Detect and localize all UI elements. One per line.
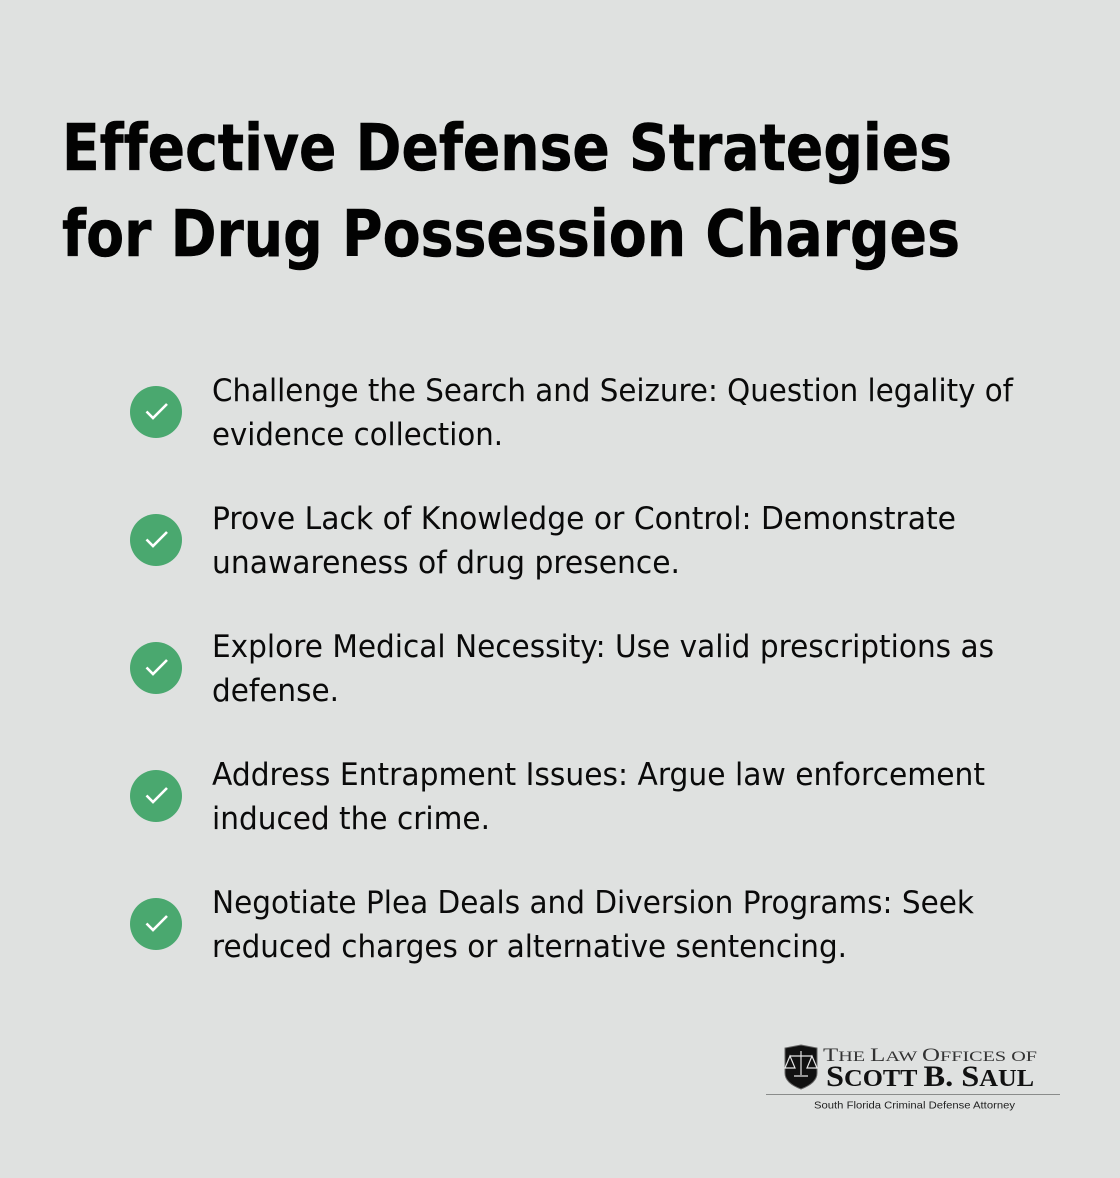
title: Effective Defense Strategies: [62, 112, 952, 186]
text: challenge the search: [212, 373, 1014, 453]
item 4: [130, 757, 985, 837]
icon: check 3: [130, 642, 182, 694]
icon: shield with scales: [785, 1045, 817, 1089]
text: medical necessity: defense.: [212, 673, 339, 709]
text: challenge the search: Challenge the Search and Seizure: Question legality of: [212, 373, 1014, 409]
icon: check 4: [130, 770, 182, 822]
icon: check 2: [130, 514, 182, 566]
logo text: SCOTT B. SAUL: [826, 1060, 1034, 1093]
text: plea deals: Negotiate Plea Deals and Diversion Programs: Seek: [212, 885, 975, 921]
logo: law offices: [766, 1045, 1060, 1112]
item 3: [130, 629, 994, 709]
text: entrapment: Address Entrapment Issues: Argue law enforcement: [212, 757, 985, 793]
text: plea deals: [212, 885, 975, 965]
text: plea deals: reduced charges or alternative sentencing.: [212, 929, 847, 965]
logo text: [823, 1046, 1037, 1093]
logo tagline: South Florida Criminal Defense Attorney: [814, 1100, 1016, 1112]
icon: check 5: [130, 898, 182, 950]
item 2: [130, 501, 956, 581]
text: entrapment: [212, 757, 985, 837]
list: defense strategies: [130, 373, 1014, 965]
text: lack of knowledge: [212, 501, 956, 581]
text: medical necessity: Explore Medical Necessity: Use valid prescriptions as: [212, 629, 994, 665]
logo text: T HE L AW O FFICES OF: [823, 1046, 1037, 1066]
icon: check 1: [130, 386, 182, 438]
text: lack of knowledge: Prove Lack of Knowledge or Control: Demonstrate: [212, 501, 956, 537]
text: challenge the search: evidence collection.: [212, 417, 503, 453]
text: medical necessity: [212, 629, 994, 709]
text: entrapment: induced the crime.: [212, 801, 490, 837]
title: for Drug Possession Charges: [62, 198, 960, 272]
item 1: [130, 373, 1014, 453]
title: [62, 112, 960, 272]
text: lack of knowledge: unawareness of drug presence.: [212, 545, 680, 581]
item 5: [130, 885, 975, 965]
